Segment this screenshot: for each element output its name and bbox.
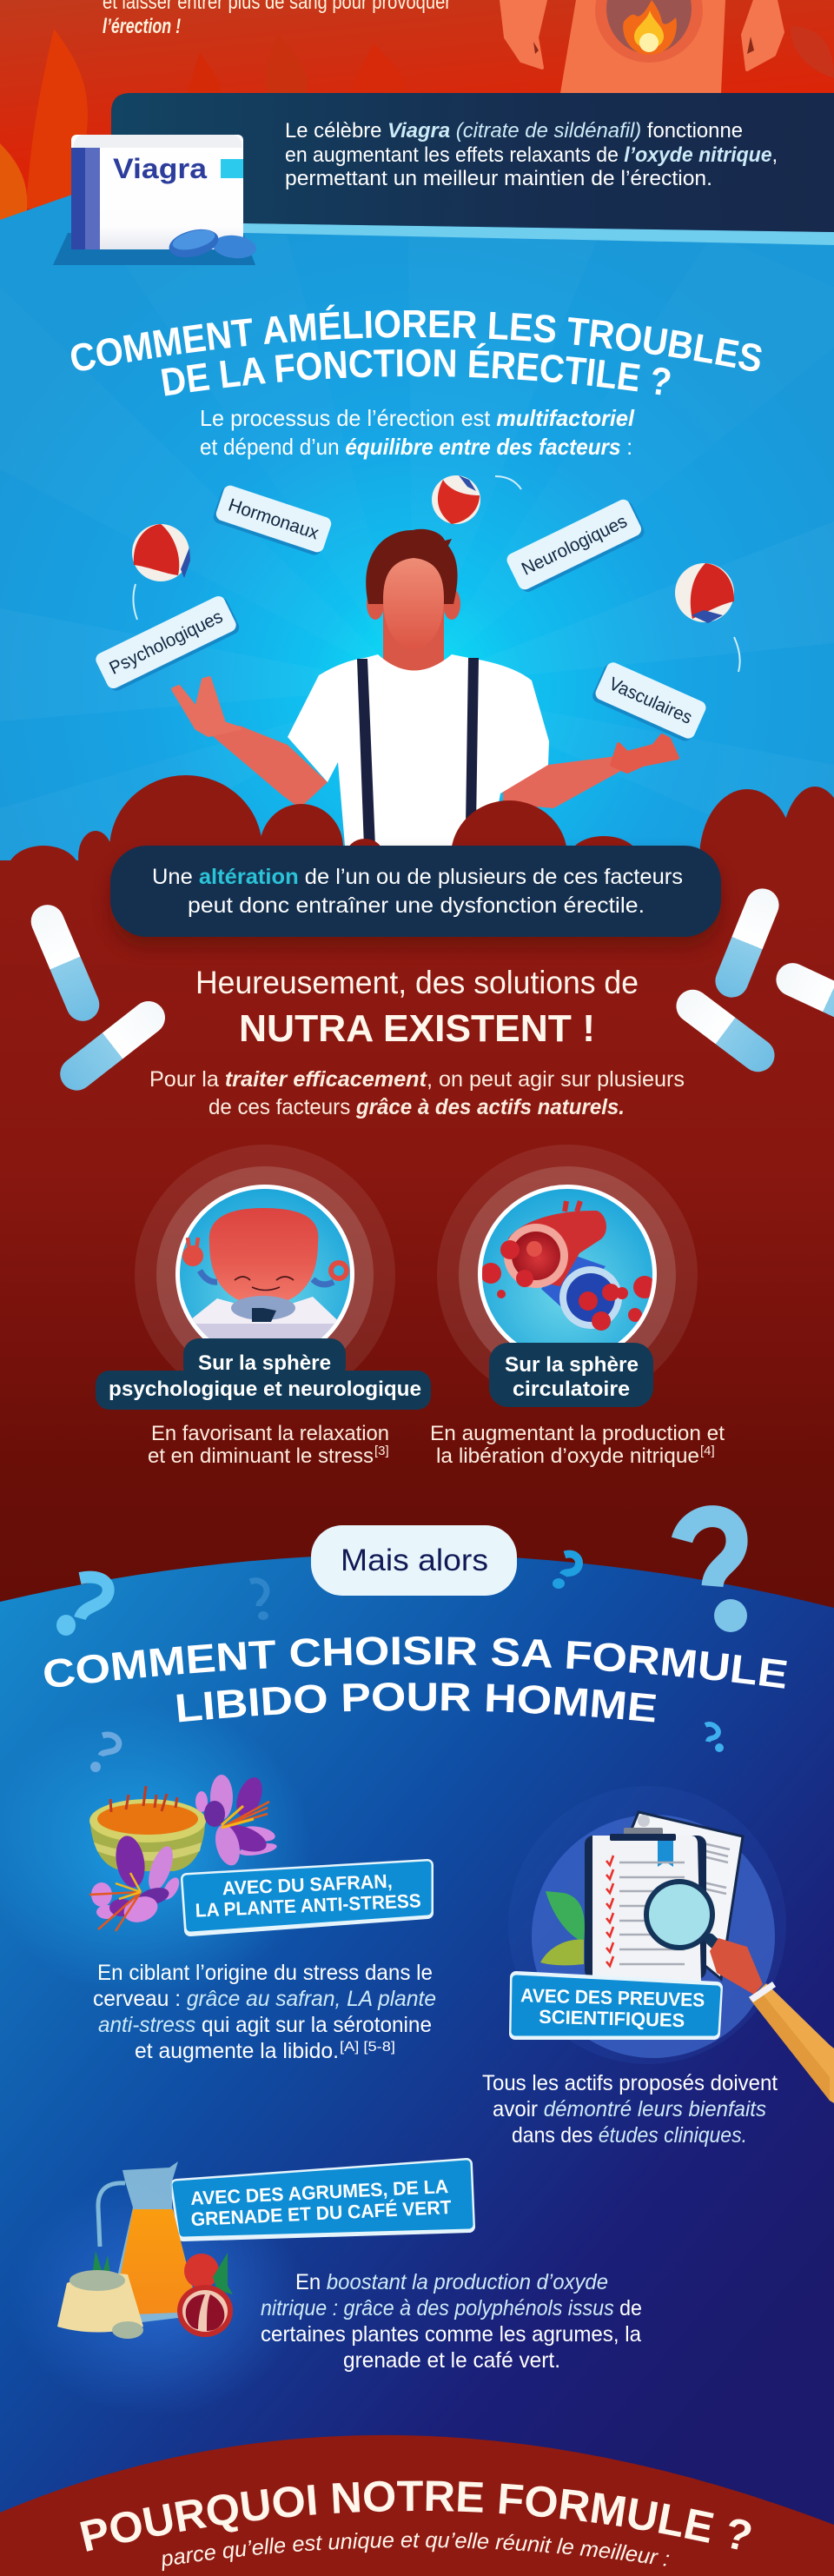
- text: oxyde nitrique polyphénols: certaines plantes comme les agrumes, la: [261, 2322, 641, 2347]
- capsule right edge: [771, 958, 834, 1036]
- text: oxyde nitrique: [4]: [700, 1444, 715, 1458]
- label: Neurologiques: [505, 496, 646, 595]
- label: safran: LA PLANTE ANTI-STRESS: [195, 1889, 421, 1922]
- label: Vasculaires: [591, 660, 708, 744]
- text: relaxation: En favorisant la relaxation: [151, 1422, 389, 1445]
- text: oxyde nitrique: [430, 1422, 725, 1468]
- icon: Viagra box and pills: Viagra: [113, 153, 207, 184]
- text: oxyde nitrique: la libération d’oxyde nitrique: [436, 1444, 699, 1468]
- heading: solutions nutra: NUTRA EXISTENT !: [239, 1007, 595, 1050]
- title: comment améliorer: COMMENT AMÉLIORER LES TROUBLES: [71, 304, 762, 372]
- capsule left lower: [54, 994, 172, 1097]
- text: preuves description: Tous les actifs proposés doivent: [482, 2071, 778, 2095]
- intro text fragment: l’érection !: [103, 15, 181, 38]
- title: comment choisir: LIBIDO POUR HOMME: [177, 1683, 656, 1723]
- panel text: permettant un meilleur maintien de l’érection.: [285, 167, 712, 190]
- text: oxyde nitrique polyphénols: grenade et le café vert.: [343, 2348, 560, 2373]
- text: safran description: En ciblant l’origine du stress dans le: [97, 1961, 433, 1985]
- panel: Viagra explanation: [111, 93, 834, 245]
- text: oxyde nitrique polyphénols: nitrique : grâce à des polyphénols issus de: [261, 2296, 642, 2320]
- label: Hormonaux: [212, 483, 333, 557]
- text: preuves description: avoir démontré leurs bienfaits: [493, 2097, 766, 2121]
- label: sphère psychologique et neurologique: psychologique et neurologique: [109, 1378, 421, 1401]
- intro: multifactoriel: [200, 405, 635, 460]
- label: safran: AVEC DU SAFRAN,: [222, 1870, 393, 1899]
- icon: circulatory sphere circle: [437, 1145, 698, 1405]
- label: agrumes grenade café: AVEC DES AGRUMES, DE LA: [190, 2175, 449, 2209]
- right hand: [612, 735, 678, 772]
- blue section background with rays: [0, 178, 834, 878]
- label: preuves scientifiques: AVEC DES PREUVES: [520, 1984, 705, 2011]
- title: pourquoi notre formule: parce qu’elle est unique et qu’elle réunit le meilleur :: [162, 2533, 669, 2571]
- label: Psychologiques: [94, 593, 242, 694]
- text: traiter efficacement: de ces facteurs grâce à des actifs naturels.: [208, 1095, 625, 1119]
- label: sphère psychologique et neurologique: [96, 1338, 431, 1410]
- icon: Viagra box and pills: [53, 135, 257, 265]
- text: safran description: [93, 1961, 436, 2063]
- icon: beach ball left: [132, 524, 190, 620]
- red bottom section: [0, 2435, 834, 2576]
- callout: Mais alors: Mais alors: [341, 1544, 488, 1577]
- capsule right upper: [711, 884, 784, 1002]
- capsule right lower: [670, 983, 781, 1079]
- label: Hormonaux: Hormonaux: [226, 495, 321, 544]
- icon: clipboard and magnifier: [508, 1786, 834, 2103]
- neck and head: [368, 608, 460, 671]
- title: comment choisir: [44, 1636, 787, 1723]
- label: safran: [187, 1865, 427, 1930]
- icon: carafe, sack and pomegranate: [57, 2161, 233, 2339]
- label: agrumes grenade café: GRENADE ET DU CAFÉ VERT: [190, 2196, 453, 2230]
- text: safran description: et augmente la libido.: [135, 2039, 339, 2063]
- text: relaxation: [3]: [374, 1444, 389, 1458]
- label: sphère circulatoire: circulatoire: [513, 1378, 630, 1401]
- panel text: [285, 119, 778, 190]
- illustration: body with flame: [501, 0, 783, 93]
- text: safran description: [A] [5-8]: [340, 2040, 395, 2055]
- shirt: [288, 654, 549, 856]
- icon: question marks: [56, 1517, 747, 1772]
- label: Psychologiques: Psychologiques: [106, 607, 226, 679]
- dark red section with cloud edge: [0, 775, 834, 1625]
- heading: solutions nutra: [195, 965, 639, 1050]
- label: sphère circulatoire: [489, 1343, 653, 1407]
- panel text: en augmentant les effets relaxants de l’oxyde nitrique,: [285, 143, 778, 167]
- label: sphère psychologique et neurologique: Sur la sphère: [198, 1351, 331, 1375]
- label: sphère circulatoire: Sur la sphère: [505, 1353, 639, 1377]
- title: comment choisir: COMMENT CHOISIR SA FORMULE: [44, 1636, 787, 1689]
- text: safran description: cerveau : grâce au safran, LA plante: [93, 1987, 436, 2011]
- text: relaxation: [148, 1422, 389, 1468]
- text: preuves description: [482, 2071, 778, 2148]
- fiery red top background: [0, 0, 834, 261]
- capsule left upper: [26, 900, 104, 1026]
- label: Neurologiques: Neurologiques: [519, 511, 631, 580]
- text: safran description: anti-stress qui agit sur la sérotonine: [98, 2013, 432, 2037]
- illustration: juggling man: [173, 529, 678, 856]
- intro: multifactoriel: et dépend d’un équilibre entre des facteurs :: [200, 434, 632, 460]
- face: [383, 558, 444, 650]
- title: pourquoi notre formule: POURQUOI NOTRE FORMULE ?: [80, 2480, 751, 2552]
- callout: alteration pill: peut donc entraîner une dysfonction érectile.: [188, 893, 645, 918]
- intro: multifactoriel: Le processus de l’érection est multifactoriel: [200, 405, 635, 431]
- heading: solutions nutra: Heureusement, des solutions de: [195, 965, 639, 1000]
- text: relaxation: et en diminuant le stress: [148, 1444, 374, 1468]
- left arm: [208, 726, 328, 808]
- label: preuves scientifiques: SCIENTIFIQUES: [539, 2006, 685, 2031]
- intro text fragment: [103, 0, 451, 38]
- icon: beach ball top: [432, 475, 521, 524]
- icon: psychological sphere circle: [135, 1145, 395, 1371]
- right arm: [503, 756, 627, 808]
- callout: alteration pill: Une altération de l’un ou de plusieurs de ces facteurs: [152, 865, 683, 889]
- suspenders: [357, 659, 375, 847]
- callout: alteration pill: [110, 846, 721, 947]
- text: traiter efficacement: [149, 1067, 685, 1119]
- left hand: [173, 678, 240, 735]
- label: preuves scientifiques: [515, 1977, 717, 2034]
- text: preuves description: dans des études cliniques.: [512, 2123, 747, 2148]
- deep blue section background: [0, 1554, 834, 2576]
- icon: beach ball right: [675, 563, 740, 672]
- icon: saffron bowl and flowers: [89, 1774, 278, 1931]
- panel text: Le célèbre Viagra (citrate de sildénafil) fonctionne: [285, 119, 743, 143]
- title: comment améliorer: DE LA FONCTION ÉRECTILE ?: [162, 342, 671, 396]
- text: oxyde nitrique polyphénols: [261, 2270, 642, 2373]
- text: traiter efficacement: Pour la traiter efficacement, on peut agir sur plusieurs: [149, 1067, 685, 1092]
- text: oxyde nitrique polyphénols: En boostant la production d’oxyde: [295, 2270, 608, 2294]
- callout: Mais alors: [311, 1525, 517, 1596]
- label: agrumes grenade café: [176, 2164, 469, 2235]
- label: Vasculaires: Vasculaires: [606, 674, 695, 728]
- text: oxyde nitrique: En augmentant la production et: [430, 1422, 725, 1445]
- hair: [366, 529, 458, 604]
